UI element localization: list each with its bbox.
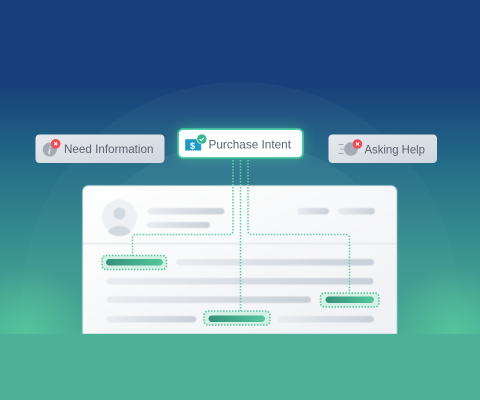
panel: profile card: [82, 186, 397, 334]
highlight: right: [320, 293, 379, 307]
background circles and corner glows: [0, 82, 480, 334]
highlight: left: [102, 256, 166, 270]
dotted connectors: [132, 160, 350, 311]
icon: dollar bill with check: $: [190, 141, 195, 151]
label: Purchase Intent: [208, 138, 292, 152]
icon: clock with red badge: [338, 139, 362, 156]
highlight: bottom: [204, 311, 270, 325]
pill: Purchase Intent: [178, 129, 303, 158]
avatar: [102, 200, 137, 236]
label: Need Information: [64, 143, 154, 156]
header placeholder lines: [147, 208, 375, 228]
ground band: [0, 334, 480, 400]
pill: Asking Help: [328, 134, 437, 163]
body placeholder lines: [106, 259, 374, 322]
pill: Need Information: [36, 134, 164, 163]
icon: info with red badge: i: [48, 146, 51, 157]
label: Asking Help: [364, 144, 425, 156]
